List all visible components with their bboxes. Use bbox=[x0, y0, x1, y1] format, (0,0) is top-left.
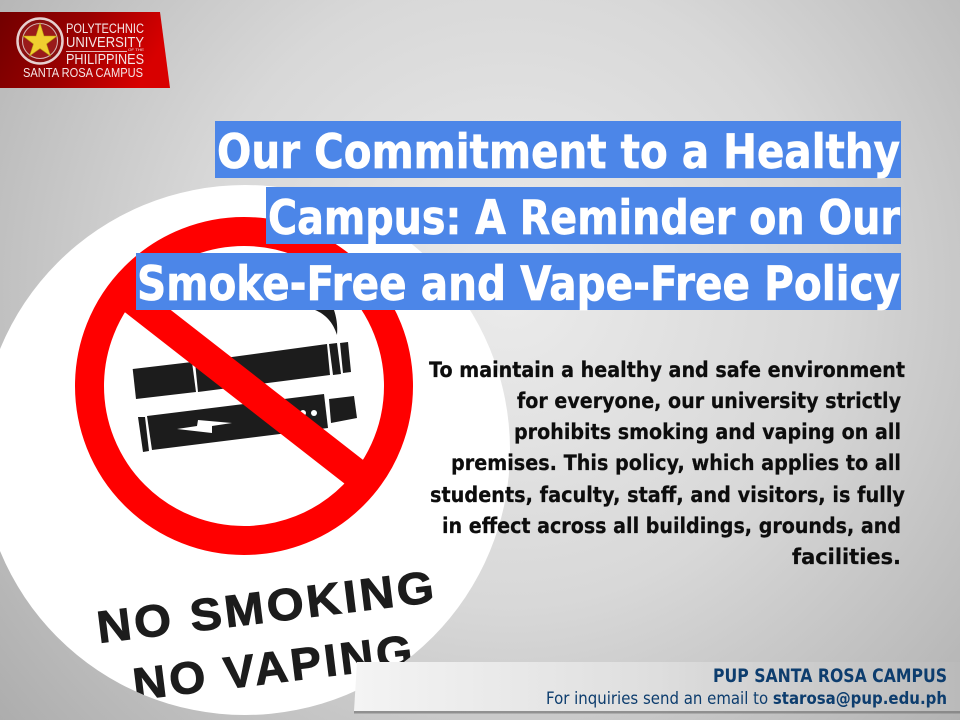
prohibition symbol bbox=[90, 232, 398, 540]
logo text: SANTA ROSA CAMPUS bbox=[23, 66, 143, 80]
policy text: premises. This policy, which applies to all bbox=[451, 451, 901, 475]
logo text bbox=[23, 21, 145, 80]
sign text: NO SMOKING bbox=[94, 561, 440, 653]
title bbox=[136, 121, 901, 312]
white disc bbox=[0, 185, 510, 715]
logo text: PHILIPPINES bbox=[66, 52, 144, 68]
sign text bbox=[98, 572, 432, 698]
no smoking no vaping sign bbox=[0, 185, 510, 715]
logo text: OF THE bbox=[128, 48, 145, 52]
logo text: POLYTECHNIC bbox=[66, 21, 144, 36]
policy text: prohibits smoking and vaping on all bbox=[514, 420, 901, 444]
logo banner bbox=[0, 12, 170, 88]
logo text: UNIVERSITY bbox=[66, 34, 144, 51]
policy text: facilities. bbox=[792, 545, 901, 569]
policy text bbox=[429, 358, 905, 569]
policy text: students, faculty, staff, and visitors, is fully bbox=[430, 483, 905, 507]
footer contact line: For inquiries send an email to starosa@pup.edu.ph bbox=[546, 689, 947, 709]
icon: university seal bbox=[18, 18, 62, 64]
sign text: NO VAPING bbox=[130, 625, 418, 710]
policy text: To maintain a healthy and safe environment bbox=[429, 358, 905, 382]
footer bar bbox=[354, 662, 960, 714]
icon: vape device bbox=[138, 394, 357, 452]
icon: vape pen bbox=[133, 310, 351, 399]
policy text: in effect across all buildings, grounds, and bbox=[442, 514, 901, 538]
policy text: for everyone, our university strictly bbox=[517, 389, 901, 413]
